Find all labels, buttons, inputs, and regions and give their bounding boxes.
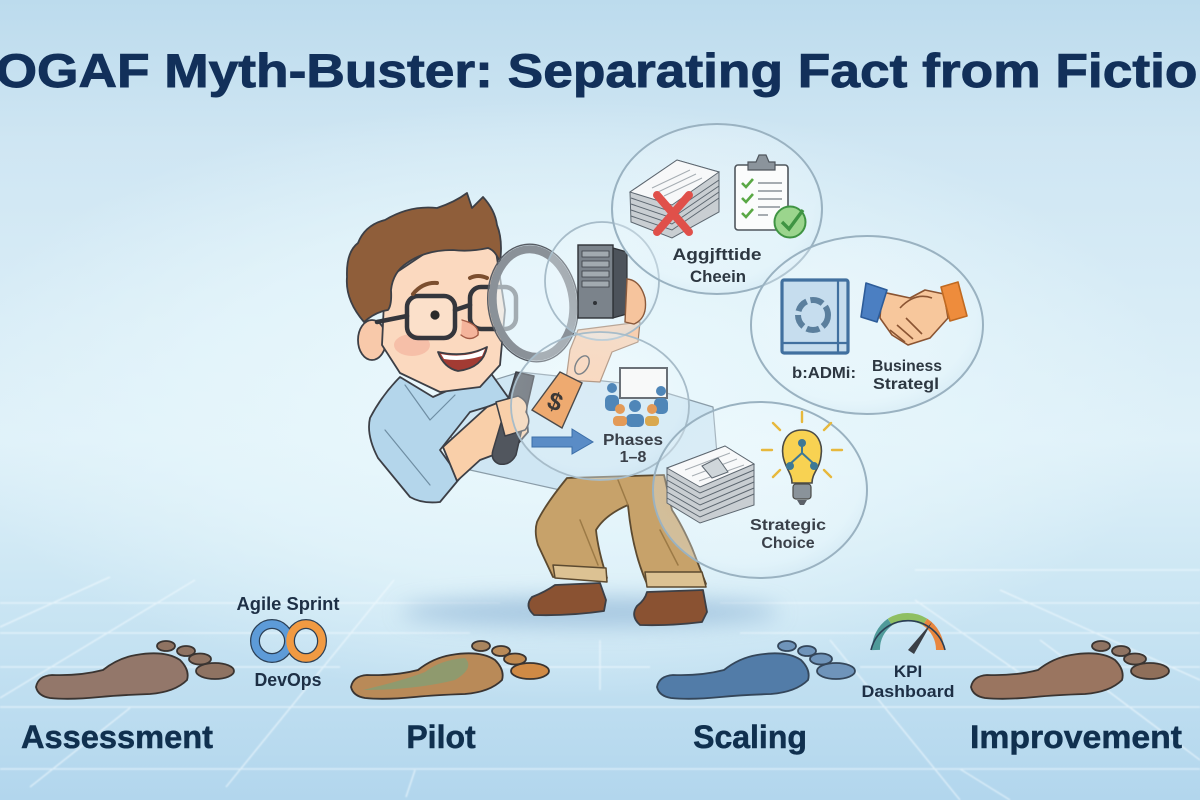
- nose: [461, 320, 478, 338]
- bubble label: Aggjfttide: [672, 245, 762, 264]
- bubble label: [603, 432, 663, 466]
- icon: clipboard checklist: [735, 155, 806, 238]
- icon: ADM book: [782, 280, 848, 353]
- icon: paper stack with red cross: [630, 160, 719, 238]
- mouth: [438, 347, 487, 371]
- trousers: [536, 475, 706, 587]
- icon: agile sprint devops loop: Agile Sprint: [236, 594, 340, 614]
- floor grid: [0, 570, 1200, 800]
- footprint: improvement: [971, 641, 1169, 699]
- icon: light bulb: [762, 412, 842, 505]
- bubble labels: Strategl: [873, 376, 939, 393]
- face: [382, 245, 505, 392]
- magnifying glass: [480, 238, 586, 464]
- bubble label: Choice: [761, 535, 815, 552]
- bubble label: Strategic: [750, 517, 826, 534]
- label: improvement: Improvement: [970, 719, 1182, 755]
- cheek blush: [394, 334, 430, 356]
- bubble labels: b:ADMi:: [792, 365, 856, 382]
- eye: [430, 310, 440, 320]
- icon: price tag: $: [543, 386, 567, 418]
- bubble: cost and phases: [511, 332, 689, 480]
- torso shirt: [430, 372, 720, 490]
- bubble labels: Business: [872, 358, 942, 375]
- icon: server tower: [578, 245, 627, 318]
- footprint: assessment: [36, 641, 234, 699]
- icon: price tag: [532, 353, 592, 428]
- icon: KPI dashboard gauge: KPI: [894, 662, 922, 681]
- label: scaling: Scaling: [693, 719, 807, 755]
- hair: [347, 193, 501, 322]
- ear: [358, 320, 386, 360]
- label: pilot: Pilot: [406, 719, 476, 755]
- icon: handshake: [861, 282, 967, 345]
- icon: KPI dashboard gauge: [862, 617, 954, 701]
- gripping fingers: [496, 396, 529, 436]
- shoes: [528, 583, 707, 625]
- bubble label: Phases: [603, 432, 663, 449]
- icon: KPI dashboard gauge: Dashboard: [862, 682, 954, 701]
- arrow: [532, 429, 593, 454]
- icon: document stack: [667, 446, 754, 523]
- icon: people at screen: [605, 368, 668, 427]
- footprint: pilot: [351, 641, 549, 699]
- bubble: ADM and business strategy: [751, 236, 983, 414]
- raised arm: [566, 322, 640, 382]
- label: assessment: Assessment: [21, 719, 213, 755]
- ground shadow: [400, 597, 780, 627]
- forearm and hand: [443, 398, 528, 481]
- glasses: [377, 287, 516, 338]
- bubble label: [750, 517, 826, 552]
- icon: hand holding server: [625, 279, 646, 324]
- character: detective with magnifying glass: [347, 193, 720, 625]
- bubble label: Cheein: [690, 267, 746, 286]
- left shirt sleeve: [369, 372, 510, 502]
- bubble: server myth: [545, 222, 659, 340]
- bubble label: 1–8: [620, 449, 646, 466]
- icon: agile sprint devops loop: [236, 594, 340, 690]
- icon: agile sprint devops loop: DevOps: [254, 670, 322, 690]
- bubble: strategic choice: [653, 402, 867, 578]
- bubble label: [672, 245, 762, 286]
- bubble labels: [792, 358, 942, 393]
- eyebrows: [413, 276, 487, 294]
- footprint: scaling: [657, 641, 855, 699]
- bubble: shelfware versus checklist: [612, 124, 822, 294]
